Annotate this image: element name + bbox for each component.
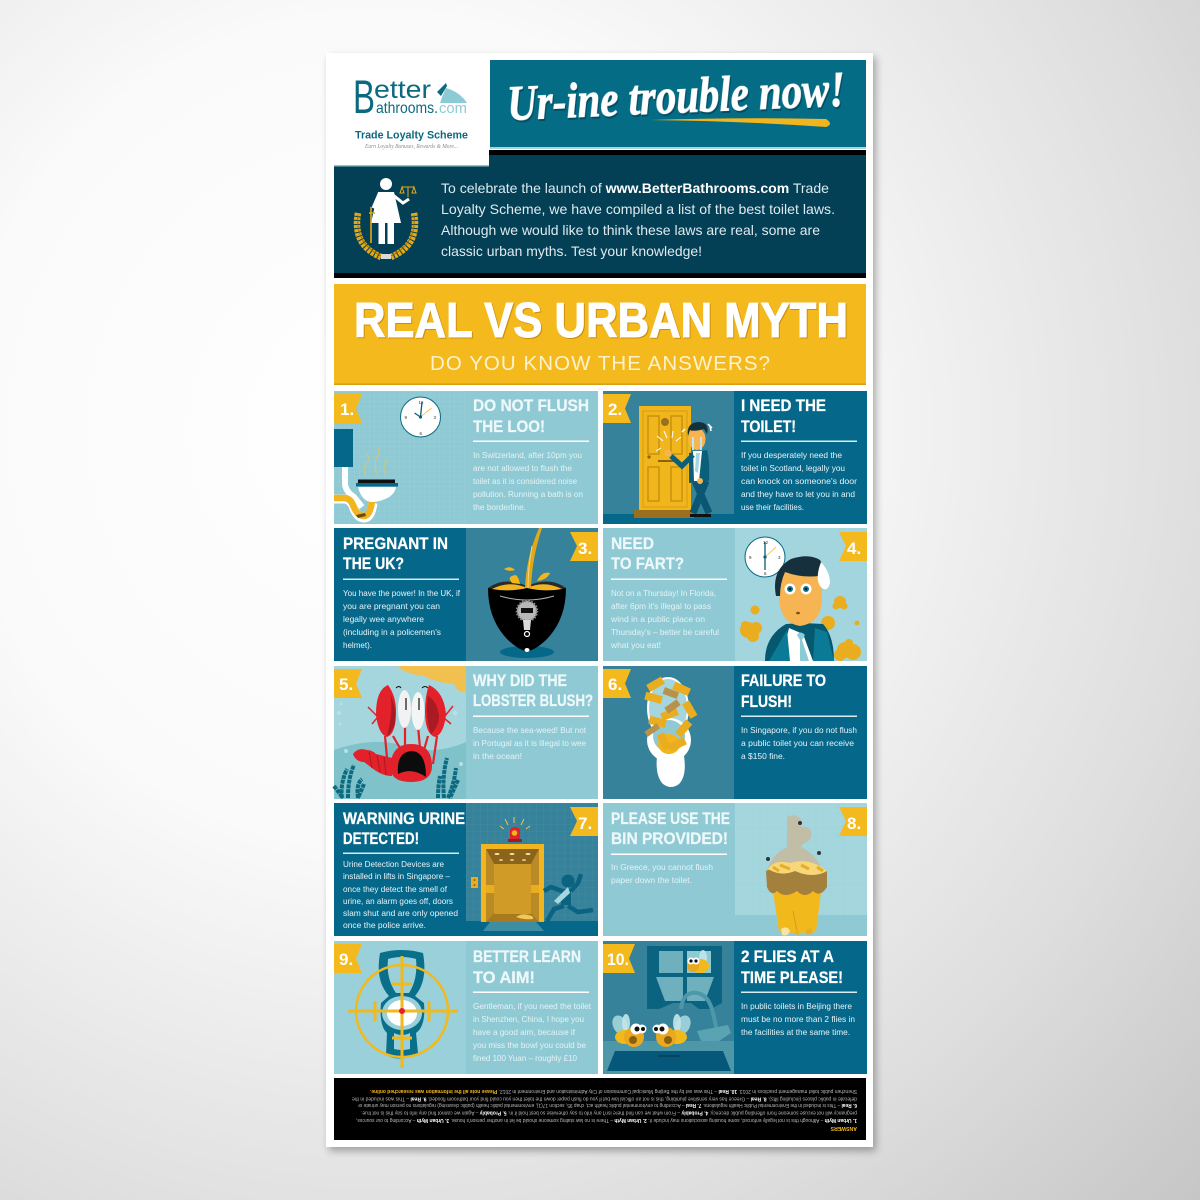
heading: WARNING URINE xyxy=(343,809,465,828)
body text: the facilities at the same time. xyxy=(741,1027,850,1037)
number badge: 10. xyxy=(607,950,629,969)
body text xyxy=(473,1001,592,1063)
upside-down answers text xyxy=(352,1088,857,1131)
body text: fined 100 Yuan – roughly £10 xyxy=(473,1053,577,1063)
illustration: toilet full of money xyxy=(603,666,734,799)
clock: 6 xyxy=(764,571,767,576)
heading xyxy=(473,671,593,710)
body text: in the ocean! xyxy=(473,751,522,761)
heading xyxy=(473,396,589,436)
number badge xyxy=(603,669,631,698)
clock: 9 xyxy=(404,415,408,420)
heading: TO AIM! xyxy=(473,968,535,987)
body text: can knock on someone's door xyxy=(741,476,857,486)
body text: In Greece, you cannot flush xyxy=(611,862,713,872)
body text: Because the sea-weed! But not xyxy=(473,725,587,735)
scheme name: Trade Loyalty Scheme xyxy=(355,130,468,142)
body text: In Switzerland, after 10pm you xyxy=(473,450,582,460)
panel 7 xyxy=(334,803,598,936)
intro panel xyxy=(334,150,866,278)
heading xyxy=(343,534,448,573)
body text: the borderline. xyxy=(473,502,526,512)
intro text: Although we would like to think these laws are real, some are xyxy=(441,222,820,238)
clock xyxy=(400,397,440,437)
body text: (including in a policemen's xyxy=(343,627,441,637)
heading: DO NOT FLUSH xyxy=(473,396,589,415)
body text: you are pregnant you can xyxy=(343,601,440,611)
panel 1 xyxy=(334,391,598,524)
illustration: policeman's helmet xyxy=(466,528,598,661)
body text: in Portugal as it is illegal to wee xyxy=(473,738,586,748)
number badge xyxy=(334,394,362,423)
heading: NEED xyxy=(611,534,654,553)
clock: 9 xyxy=(749,555,752,560)
number badge xyxy=(570,532,598,561)
body text: paper down the toilet. xyxy=(611,875,692,885)
heading: FAILURE TO xyxy=(741,671,826,690)
heading xyxy=(611,809,730,848)
body text xyxy=(473,450,583,512)
intro text: To celebrate the launch of www.BetterBathrooms.com Trade xyxy=(441,180,829,196)
subheading: DO YOU KNOW THE ANSWERS? xyxy=(430,352,770,375)
headline panel xyxy=(334,284,866,385)
body text: If you desperately need the xyxy=(741,450,842,460)
body text: urine, an alarm goes off, doors xyxy=(343,896,453,906)
body text: Not on a Thursday! In Florida, xyxy=(611,588,716,598)
headline: REAL VS URBAN MYTH xyxy=(354,294,848,348)
body text: Thursday's – better be careful xyxy=(611,627,719,637)
body text: slam shut and are only opened xyxy=(343,908,458,918)
upside-down answers text: ANSWERS xyxy=(830,1125,857,1131)
number badge xyxy=(603,394,631,423)
body text: in Shenzhen, China, I hope you xyxy=(473,1014,584,1024)
body text: In Singapore, if you do not flush xyxy=(741,725,857,735)
panel 4 xyxy=(603,528,867,661)
body text: have a good aim, because if xyxy=(473,1027,576,1037)
body text: helmet). xyxy=(343,640,372,650)
answers panel xyxy=(334,1078,866,1140)
illustration: flies at a window xyxy=(603,941,734,1074)
heading: THE LOO! xyxy=(473,417,545,436)
panel 3 xyxy=(334,528,598,661)
heading xyxy=(741,947,843,987)
title underline swoosh xyxy=(650,118,830,127)
body text xyxy=(473,725,587,761)
body text: toilet in Scotland, legally you xyxy=(741,463,845,473)
fly xyxy=(609,1013,646,1047)
heading: BIN PROVIDED! xyxy=(611,829,728,848)
heading: PREGNANT IN xyxy=(343,534,448,553)
body text xyxy=(611,862,713,885)
heading xyxy=(741,396,826,436)
panel 9 xyxy=(334,941,598,1074)
body text: once the police arrive. xyxy=(343,920,426,930)
running man xyxy=(544,874,593,921)
panel 8 xyxy=(603,803,867,936)
number badge: 4. xyxy=(847,539,861,558)
heading: TOILET! xyxy=(741,417,796,436)
clock: 3 xyxy=(778,555,781,560)
body text xyxy=(343,588,461,650)
body text: after 6pm it's illegal to pass xyxy=(611,601,711,611)
heading: THE UK? xyxy=(343,554,404,573)
intro text: classic urban myths. Test your knowledge! xyxy=(441,243,702,259)
upside-down answers text: defecate in public places (including lifts). 8. Real – Greece has very sensitive plumbing, this is not an official law but if you do flush paper down the toilet then you could find your bathroom flooded. 9. Real – This was included in the xyxy=(352,1096,857,1102)
illustration: man knocking on door xyxy=(603,391,734,518)
body text xyxy=(741,725,857,761)
body text xyxy=(741,450,857,512)
clock xyxy=(745,537,785,577)
body text: You have the power! In the UK, if xyxy=(343,588,461,598)
logo: com xyxy=(439,100,467,117)
fly xyxy=(652,1013,694,1047)
body text: what you eat! xyxy=(610,640,661,650)
number badge: 1. xyxy=(340,400,354,419)
illustration: lift alarm xyxy=(466,803,598,936)
body text xyxy=(610,588,719,650)
panel 6 xyxy=(603,666,867,799)
illustration: toilet in crosshair xyxy=(334,941,466,1074)
panel 2 xyxy=(603,391,867,524)
logo: athrooms. xyxy=(376,100,438,117)
upside-down answers text: Shenzhen public toilet management practices in 2013. 10. Real – This was set by the Beijing Municipal Commission of City Administration and Environment in 2012. Please note all the information was researched online. xyxy=(369,1088,857,1094)
number badge xyxy=(570,807,598,836)
number badge: 5. xyxy=(339,675,353,694)
body text xyxy=(741,1001,855,1037)
number badge: 9. xyxy=(339,950,353,969)
title: Ur-ine trouble now! xyxy=(506,60,846,131)
heading xyxy=(473,947,581,987)
number badge xyxy=(334,669,362,698)
body text: legally wee anywhere xyxy=(343,614,424,624)
heading xyxy=(343,809,465,848)
heading: I NEED THE xyxy=(741,396,826,415)
poster shadow xyxy=(329,57,876,1151)
number badge xyxy=(334,944,362,973)
illustration: sweating man xyxy=(735,528,867,661)
body text: wind in a public place on xyxy=(610,614,705,624)
heading: TIME PLEASE! xyxy=(741,968,843,987)
number badge: 2. xyxy=(608,400,622,419)
heading xyxy=(611,534,684,573)
number badge: 6. xyxy=(608,675,622,694)
number badge xyxy=(839,807,867,836)
heading: 2 FLIES AT A xyxy=(741,947,834,966)
body text: Gentleman, if you need the toilet xyxy=(473,1001,592,1011)
heading xyxy=(741,671,826,711)
body text: are not allowed to flush the xyxy=(473,463,572,473)
body text: and they have to let you in and xyxy=(741,489,855,499)
illustration: noisy toilet xyxy=(334,391,466,524)
intro text xyxy=(441,180,835,259)
number badge: 7. xyxy=(578,814,592,833)
number badge xyxy=(603,944,635,973)
title banner xyxy=(490,60,866,149)
illustration: blushing lobster xyxy=(334,666,466,799)
clock: 12 xyxy=(763,540,769,545)
body text: toilet as it is considered noise xyxy=(473,476,577,486)
heading: BETTER LEARN xyxy=(473,947,581,966)
heading: DETECTED! xyxy=(343,829,419,848)
logo xyxy=(353,70,467,123)
logo block xyxy=(326,53,489,166)
icon: lady justice with wreath xyxy=(357,178,416,259)
heading: LOBSTER BLUSH? xyxy=(473,691,593,710)
number badge xyxy=(839,532,867,561)
body text xyxy=(343,859,458,930)
panel 5 xyxy=(334,666,598,799)
intro text: Loyalty Scheme, we have compiled a list of the best toilet laws. xyxy=(441,201,835,217)
body text: use their facilities. xyxy=(741,502,804,512)
body text: must be no more than 2 flies in xyxy=(741,1014,855,1024)
logo: etter xyxy=(374,76,431,104)
body text: a $150 fine. xyxy=(741,751,785,761)
number badge: 8. xyxy=(847,814,861,833)
clock: 12 xyxy=(418,400,424,405)
body text: a public toilet you can receive xyxy=(741,738,854,748)
body text: In public toilets in Beijing there xyxy=(741,1001,852,1011)
body text: you miss the bowl you could be xyxy=(473,1040,586,1050)
body text: once they detect the smell of xyxy=(343,884,448,894)
logo: B xyxy=(353,70,375,123)
upside-down answers text: 1. Urban Myth – Although this is not legally enforced, some housing associations may include it. 2. Urban Myth – There is no law stating someone should be let in another person's house. 3. Urban Myth – According to our sources, xyxy=(356,1117,857,1123)
panel 10 xyxy=(603,941,867,1074)
upside-down answers text: pregnancy will not excuse someone from offending public decency. 4. Probably – From what we can find there isn't any info to say otherwise so best hold it in. 5. Probably – Again we cannot find any info to say this is not true. xyxy=(361,1110,857,1116)
heading: FLUSH! xyxy=(741,692,792,711)
body text: installed in lifts in Singapore – xyxy=(343,871,450,881)
scheme tagline: Earn Loyalty Bonuses, Rewards & More... xyxy=(364,144,458,150)
fly xyxy=(687,950,709,973)
poster sheet xyxy=(326,53,873,1147)
number badge: 3. xyxy=(578,539,592,558)
clock: 6 xyxy=(420,431,422,436)
heading: PLEASE USE THE xyxy=(611,809,730,828)
illustration: overflowing bin xyxy=(735,803,867,936)
body text: Urine Detection Devices are xyxy=(343,859,444,869)
clock: 3 xyxy=(434,415,436,420)
heading: TO FART? xyxy=(611,554,684,573)
upside-down answers text: 6. Real – This is included in the Environmental Public Health regulations. 7. Real – According to environmental public health act, chap 95, section 17(1), environmental public health (public cleansing) regulations no person may urinate or xyxy=(358,1102,857,1108)
heading: WHY DID THE xyxy=(473,671,567,690)
body text: pollution. Running a bath is on xyxy=(473,489,583,499)
